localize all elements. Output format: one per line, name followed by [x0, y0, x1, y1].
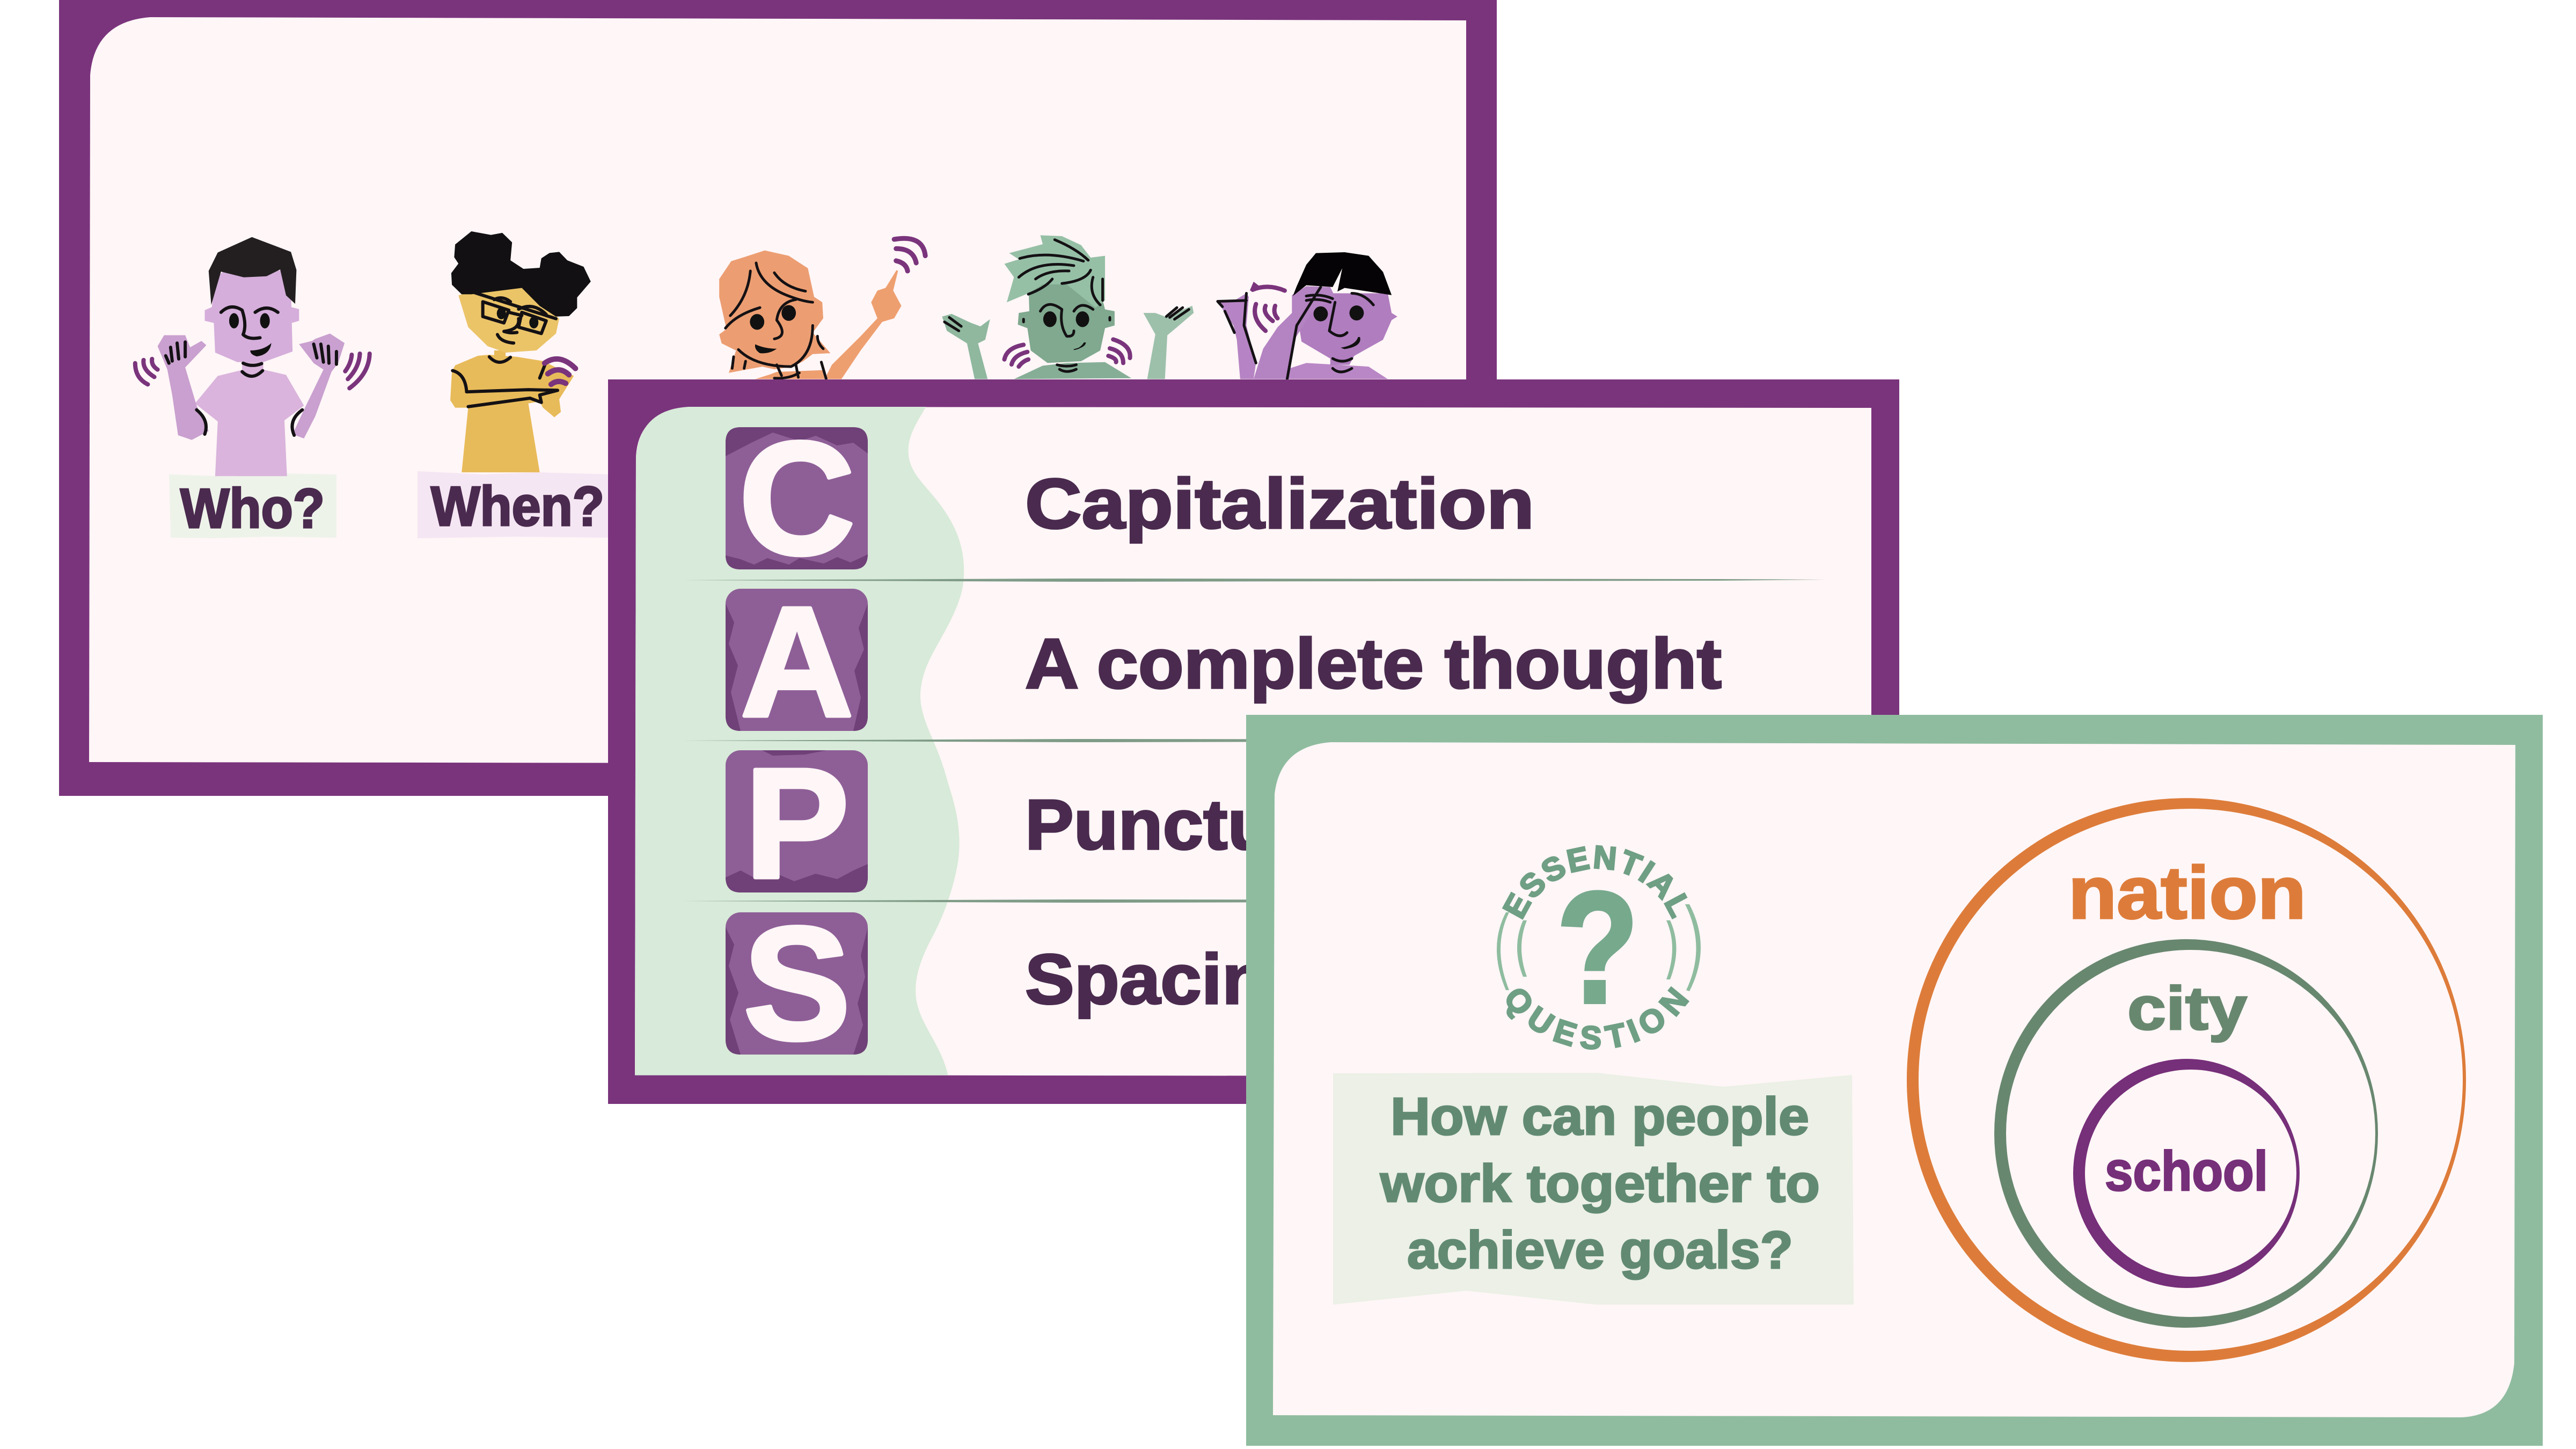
label: When?: When? — [431, 475, 604, 538]
tile: P: P — [745, 736, 849, 911]
heading: Capitalization: Capitalization — [1025, 464, 1534, 543]
label: nation: nation — [2068, 852, 2306, 934]
label: city: city — [2127, 975, 2247, 1043]
essential question text: How can people — [1391, 1087, 1809, 1146]
slide frame — [59, 0, 1497, 796]
heading: Spacing: Spacing — [1025, 940, 1312, 1019]
character: purple signer touching forehead — [1218, 252, 1397, 379]
slide background — [89, 17, 1466, 764]
question background — [1333, 1073, 1854, 1305]
essential question text: work together to — [1380, 1154, 1820, 1213]
slide frame — [1246, 715, 2543, 1446]
ring arcs — [1497, 904, 1701, 991]
essential question text — [1380, 1087, 1820, 1279]
slide background — [1273, 742, 2515, 1417]
character: orange signer pointing up — [719, 238, 925, 379]
circle: city — [1994, 939, 2378, 1328]
character: who signer — [135, 237, 370, 476]
label: school: school — [2105, 1140, 2268, 1203]
essential question badge — [1497, 845, 1701, 1050]
concentric circles diagram — [1907, 798, 2466, 1362]
circle: school — [2073, 1059, 2300, 1288]
circle: nation — [1907, 798, 2466, 1362]
tile: A: A — [741, 574, 853, 749]
slide background — [635, 407, 1871, 1077]
label: Who?: Who? — [180, 478, 325, 540]
dividers — [684, 579, 1825, 903]
label background: Who — [169, 473, 336, 538]
character: green signer with raised hands — [942, 235, 1194, 379]
label background: When — [418, 471, 612, 538]
wavy green side panel — [635, 407, 964, 1075]
circular text: ESSENTIAL: ESSENTIAL — [1502, 845, 1687, 920]
essential question text: achieve goals? — [1407, 1220, 1793, 1279]
slide frame — [608, 379, 1899, 1104]
circular text: QUESTION: QUESTION — [1506, 986, 1689, 1050]
panel: CAPS slide — [608, 379, 1899, 1104]
heading: Punctuation: Punctuation — [1025, 785, 1446, 864]
heading: A complete thought: A complete thought — [1025, 624, 1722, 703]
character: when signer — [450, 231, 591, 472]
question mark: ? — [1556, 859, 1639, 1037]
tile: S: S — [743, 893, 851, 1073]
tile: C: C — [739, 408, 855, 588]
panel: essential question slide — [1246, 715, 2543, 1446]
panel: sign language question words slide — [59, 0, 1497, 796]
